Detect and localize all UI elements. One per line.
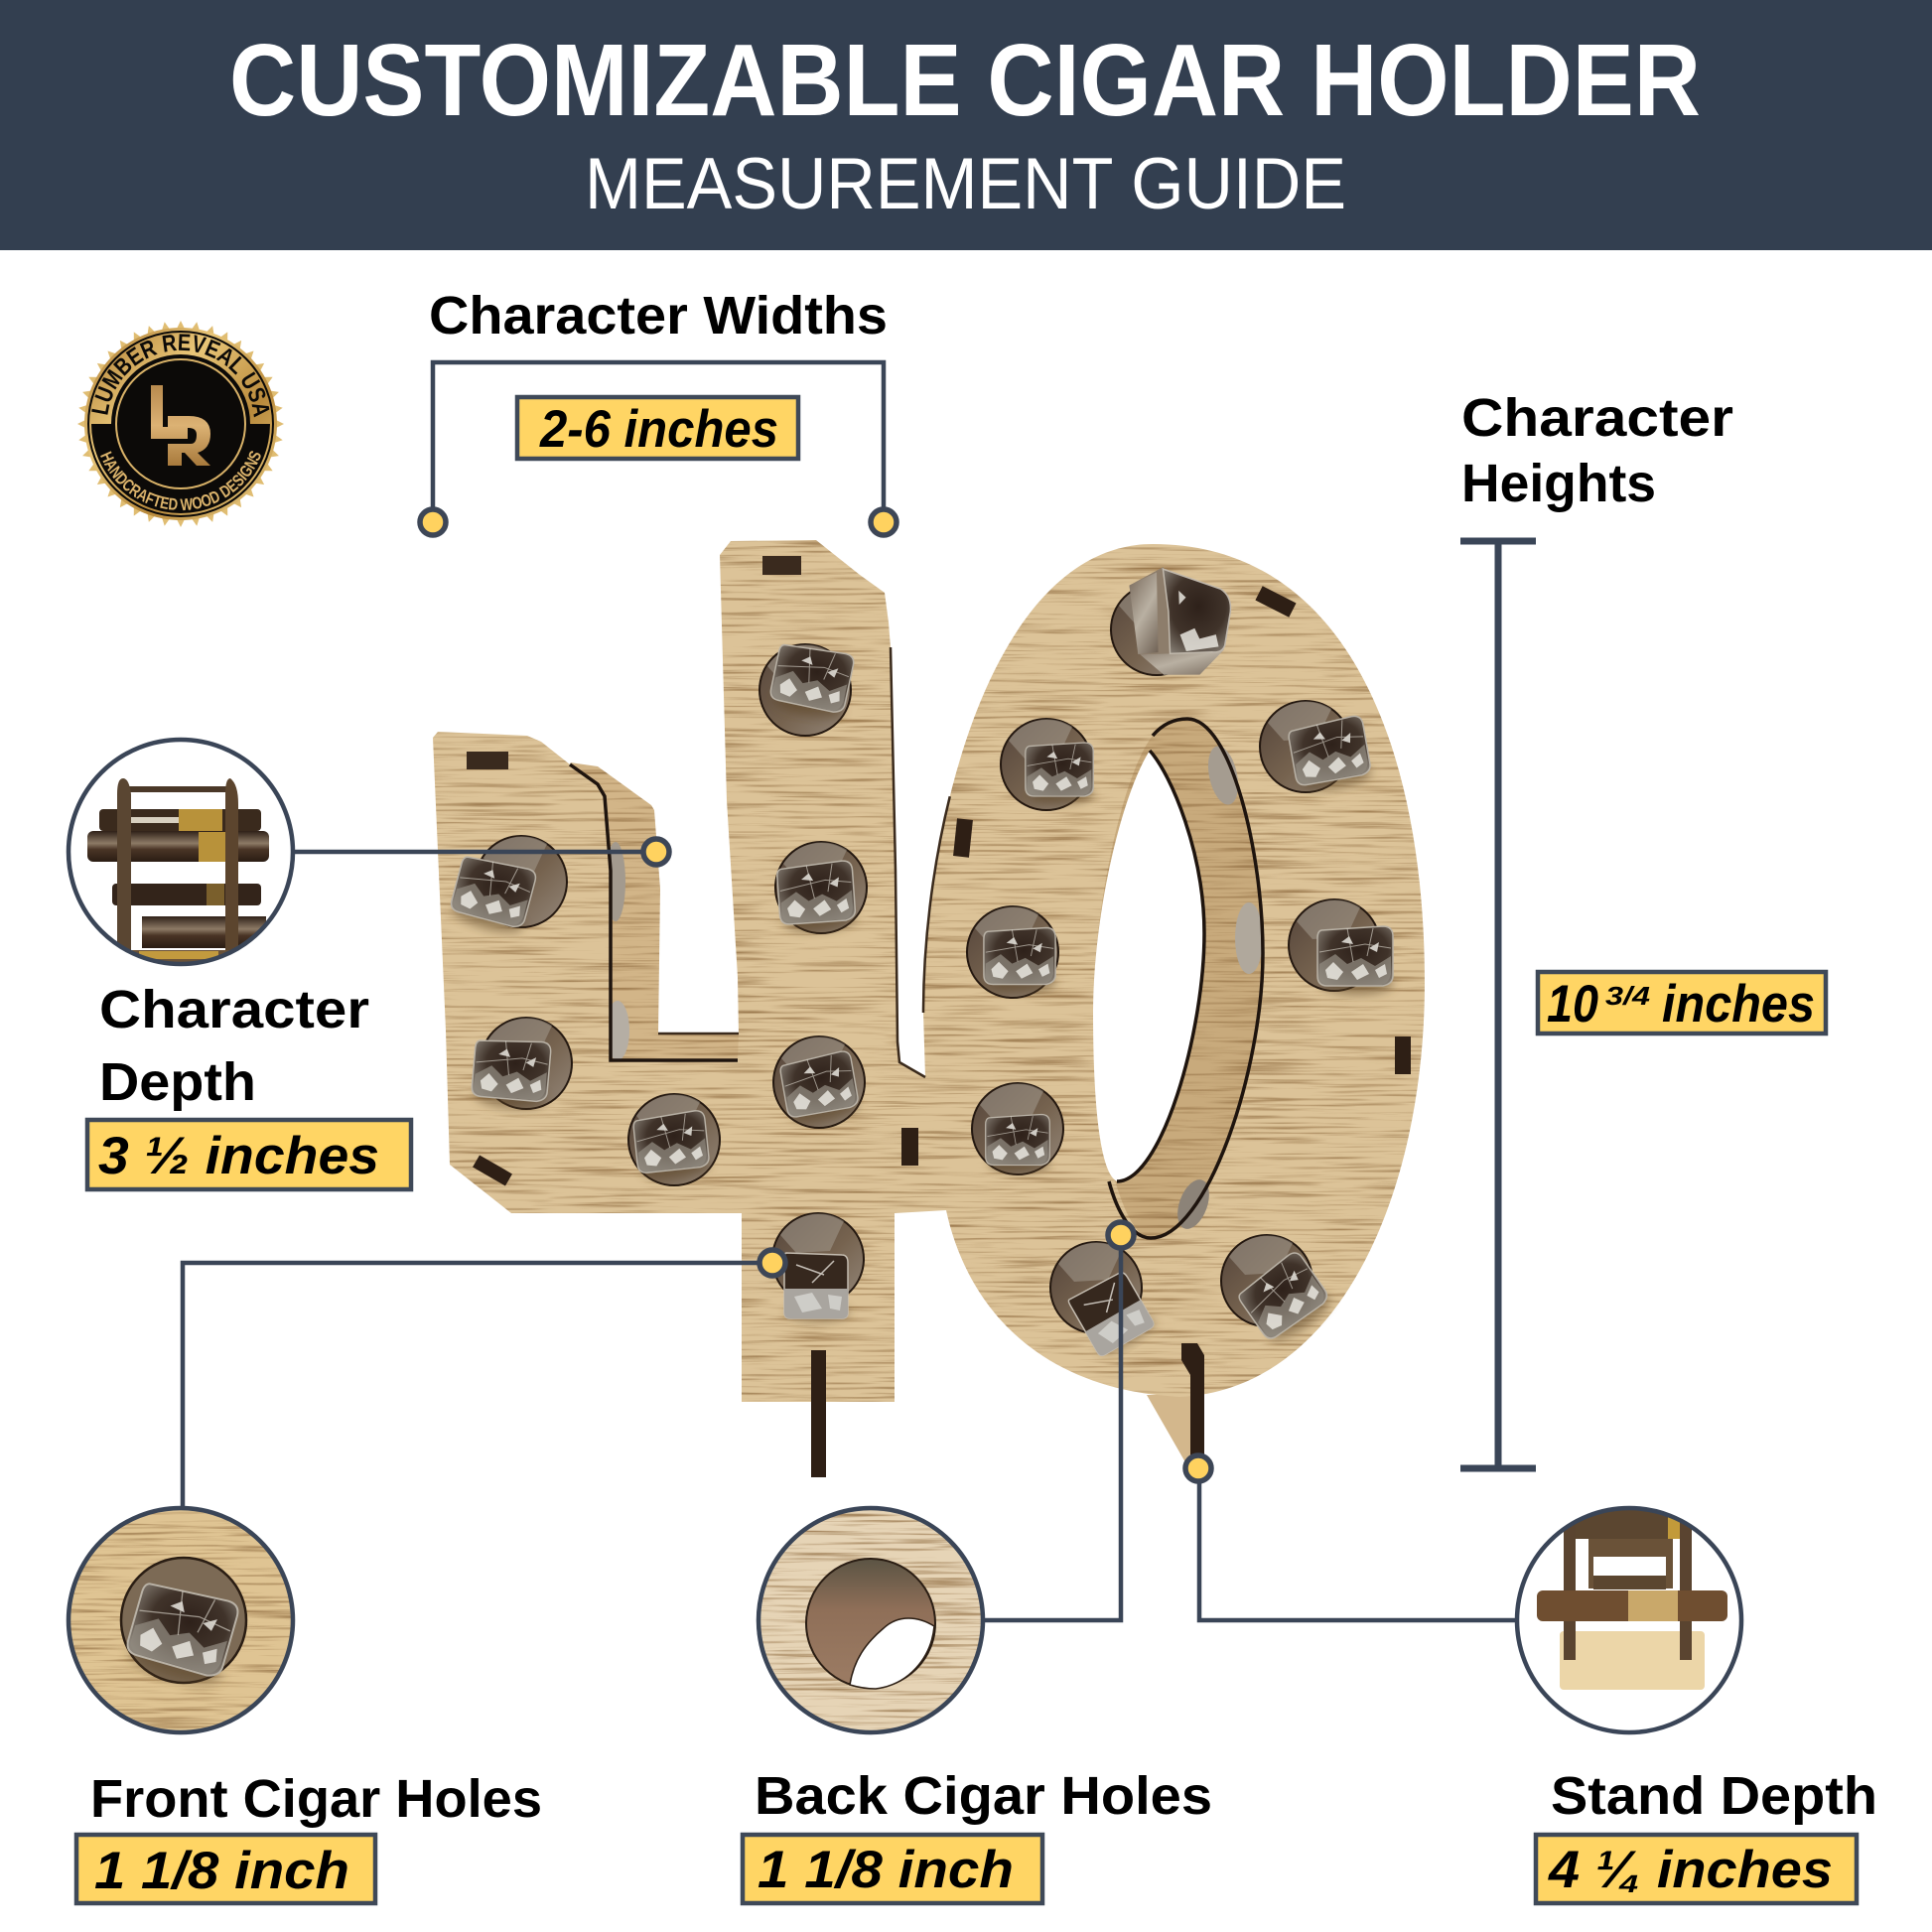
inset photo: stand side view	[1517, 1508, 1741, 1732]
heading: character heights: Heights	[1461, 454, 1656, 513]
heading: character depth	[99, 980, 369, 1112]
wooden front face	[422, 531, 1435, 1415]
bracket	[433, 362, 884, 522]
stand wedge	[1147, 1343, 1191, 1462]
leader line	[1199, 1469, 1516, 1620]
logo badge: Lumber Reveal USA	[77, 321, 284, 527]
wooden back layer of the 4	[570, 762, 739, 1059]
stand leg left	[811, 1350, 826, 1477]
inset photo: back hole	[755, 1504, 987, 1736]
leader dot	[643, 839, 669, 865]
heading: front cigar holes: Front Cigar Holes	[90, 1769, 542, 1829]
value badge: 4 1/4 inches: 4 ¼ inches	[1548, 1841, 1833, 1899]
zero centre opening	[1094, 721, 1261, 1237]
inset photo: side view of the holder	[69, 740, 293, 970]
value badge: 1 1/8 inch: 1 1/8 inch	[94, 1842, 349, 1900]
header band	[0, 0, 1932, 250]
heading: character depth: Depth	[99, 1052, 256, 1112]
leader dot	[1108, 1222, 1134, 1248]
value badge: 1 1/8 inch: 1 1/8 inch	[758, 1841, 1014, 1899]
logo ring text bottom: HANDCRAFTED WOOD DESIGNS	[100, 451, 261, 510]
height dimension bar	[1460, 541, 1536, 1468]
logo ring text top: LUMBER REVEAL USA	[91, 334, 270, 417]
heading: back cigar holes: Back Cigar Holes	[755, 1766, 1212, 1826]
value badge: 10 3/4 inches	[1538, 972, 1826, 1034]
value badge: 10 3/4 inches: inches	[1662, 975, 1815, 1034]
bracket end dot right	[871, 509, 897, 535]
value badge: 10 3/4 inches: 3/4	[1605, 981, 1651, 1011]
value badge: 10 3/4 inches: 10	[1547, 975, 1598, 1034]
leader line	[183, 1263, 772, 1506]
annotation: character depth	[69, 740, 669, 1189]
inset photo: front hole with cigar	[65, 1504, 297, 1736]
bracket end dot left	[420, 509, 446, 535]
value badge: 3 1/2 inches: 3 ½ inches	[98, 1127, 379, 1185]
annotation: stand depth	[1185, 1455, 1877, 1903]
value badge: 1 1/8 inch	[743, 1835, 1042, 1903]
leader line	[984, 1236, 1121, 1620]
product photo: wooden 40 cigar holder	[422, 531, 1435, 1477]
heading: character depth: Character	[99, 980, 369, 1039]
leader dot	[759, 1250, 785, 1276]
dark edge lines	[570, 764, 738, 1060]
heading: stand depth: Stand Depth	[1551, 1766, 1877, 1826]
subtitle: MEASUREMENT GUIDE	[585, 144, 1346, 224]
annotation: character heights	[1460, 388, 1826, 1468]
value badge: 2-6 inches: 2-6 inches	[539, 400, 778, 459]
cigars in holes	[447, 564, 1393, 1360]
title: CUSTOMIZABLE CIGAR HOLDER	[229, 23, 1701, 137]
annotation: back cigar holes	[743, 1222, 1212, 1903]
heading: character heights: Character	[1461, 388, 1733, 448]
heading: character heights	[1461, 388, 1733, 513]
cut-out slots	[467, 556, 1411, 1477]
heading: character widths: Character Widths	[429, 286, 888, 345]
annotation: front cigar holes	[65, 1250, 785, 1903]
value badge: 1 1/8 inch	[76, 1835, 375, 1903]
annotation: character widths	[420, 286, 897, 535]
logo monogram LR	[151, 385, 210, 466]
leader dot	[1185, 1455, 1211, 1481]
leader line	[295, 850, 657, 854]
